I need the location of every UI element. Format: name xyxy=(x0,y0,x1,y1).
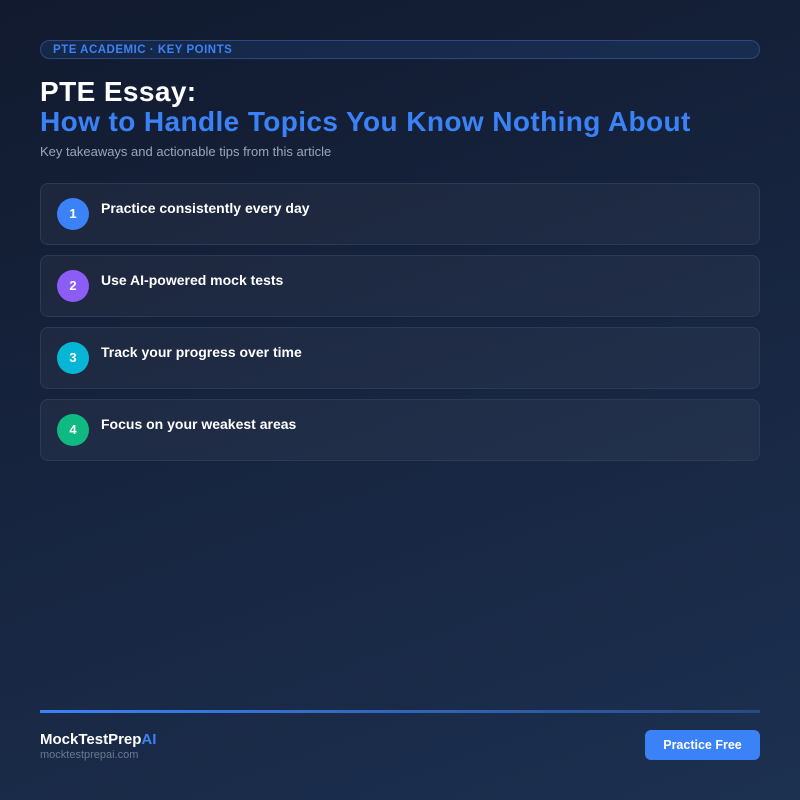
title line 1: PTE Essay: xyxy=(40,76,197,107)
button: practice free xyxy=(645,730,760,760)
button: practice free: Practice Free xyxy=(663,738,742,752)
badge 3: 3 xyxy=(69,350,77,365)
card text 1: Practice consistently every day xyxy=(101,200,310,216)
badge 4: 4 xyxy=(69,422,77,437)
brand url: mocktestprepai.com xyxy=(40,749,138,761)
card 1 xyxy=(40,183,760,245)
card 3 xyxy=(40,327,760,389)
tag: category label xyxy=(40,40,760,59)
card text 4: Focus on your weakest areas xyxy=(101,416,296,432)
badge 4 xyxy=(57,414,89,446)
card text 2: Use AI-powered mock tests xyxy=(101,272,283,288)
subtitle: Key takeaways and actionable tips from this article xyxy=(40,144,331,159)
badge 2: 2 xyxy=(69,278,77,293)
brand name: MockTestPrepAI xyxy=(40,731,156,748)
title line 2: How to Handle Topics You Know Nothing About xyxy=(40,106,691,137)
card 4 xyxy=(40,399,760,461)
tag: category label: PTE ACADEMIC · KEY POINTS xyxy=(53,44,232,56)
card 2 xyxy=(40,255,760,317)
badge 1: 1 xyxy=(69,206,77,221)
card text 3: Track your progress over time xyxy=(101,344,302,360)
badge 2 xyxy=(57,270,89,302)
badge 3 xyxy=(57,342,89,374)
badge 1 xyxy=(57,198,89,230)
